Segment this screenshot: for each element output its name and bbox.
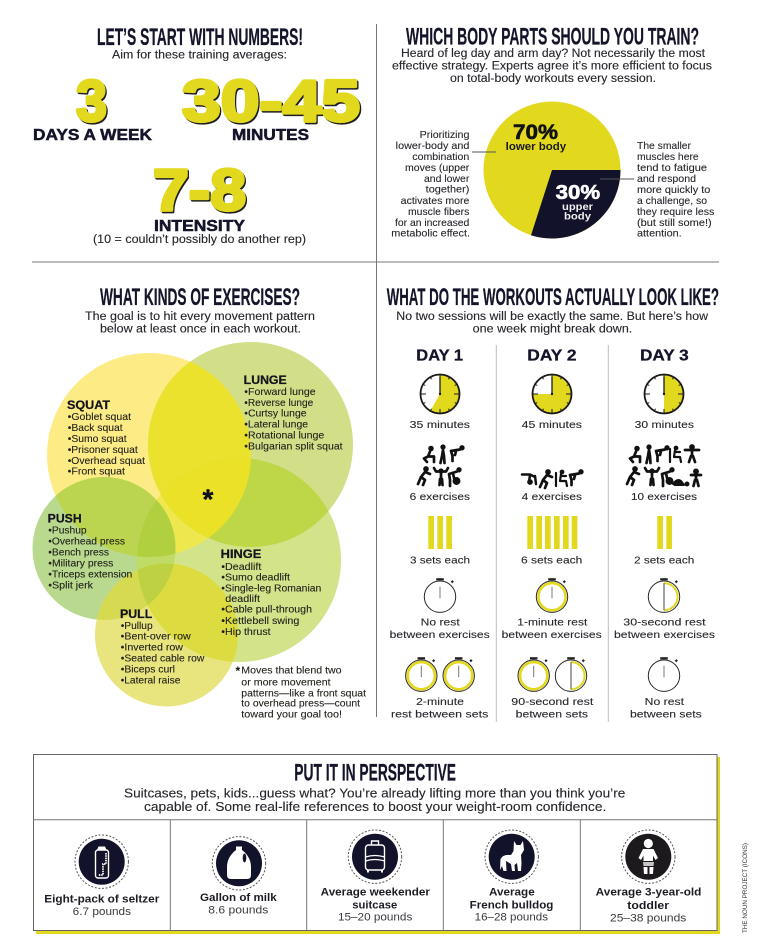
footnote: blended moves: or more movement: [241, 676, 331, 688]
list: push: [48, 512, 132, 591]
heading: let's start with numbers: LET’S START WITH NUMBERS!: [97, 24, 303, 51]
list: squat: •Goblet squat: [68, 411, 131, 423]
list: hinge: •Deadlift: [221, 561, 261, 573]
bars: 2 sets: [657, 516, 672, 549]
list: pull: •Bent-over row: [121, 631, 191, 643]
column: day 2: 4 exercises: [522, 491, 582, 503]
callout: upper body: tend to fatigue: [637, 162, 707, 174]
footnote: blended moves: to overhead press—count: [241, 698, 360, 710]
panel: numbers: [33, 24, 361, 246]
column: day 1: 2-minute: [416, 696, 464, 708]
panel: body parts: [391, 24, 714, 240]
list: hinge: •Single-leg Romanian: [221, 583, 321, 595]
list: pull: •Seated cable row: [121, 653, 205, 665]
item: french bulldog: [470, 830, 553, 924]
list: push: PUSH: [48, 512, 82, 526]
list: squat: •Prisoner squat: [68, 444, 138, 456]
item: toddler: 25–38 pounds: [610, 913, 687, 925]
stat: 7-8 intensity: INTENSITY: [154, 218, 245, 235]
stat: 7-8 intensity: 7-8: [154, 159, 247, 224]
panel: exercises: [32, 284, 366, 720]
column: day 2: 1-minute rest: [517, 617, 587, 629]
column: day 2: 90-second rest: [511, 696, 593, 708]
list: lunge: •Curtsy lunge: [244, 408, 307, 420]
item: milk: 8.6 pounds: [208, 905, 269, 917]
column: day 3: No rest: [645, 696, 684, 708]
callout: upper body: [600, 140, 714, 240]
section dividers: [32, 24, 719, 717]
list: push: •Bench press: [48, 547, 109, 559]
list: hinge: deadlift: [225, 593, 260, 605]
list: lunge: •Forward lunge: [244, 386, 316, 398]
intro text: real-life references: [124, 785, 625, 814]
stopwatch: no rest between exercises: [424, 578, 456, 612]
item: milk: Gallon of milk: [200, 892, 278, 904]
intro text: body parts: effective strategy. Experts agree it’s more efficient to focus: [392, 60, 712, 72]
column: day 3: 30-second rest: [623, 617, 706, 629]
intro text: body parts: [392, 48, 712, 85]
callout: lower body: muscle fibers: [408, 206, 469, 218]
stat: 3 days a week: [33, 69, 152, 144]
stat: 3 days a week: 3: [77, 70, 108, 135]
column: day 2: [502, 348, 602, 720]
column: day 3: 2 sets each: [634, 554, 694, 566]
pie chart: 70/30: 70%: [513, 121, 558, 144]
list: squat: •Overhead squat: [68, 455, 145, 467]
callout: lower body: metabolic effect.: [391, 228, 470, 240]
footnote: blended moves: toward your goal too!: [241, 708, 342, 720]
callout: upper body: (but still some!): [637, 217, 712, 229]
list: push: •Triceps extension: [48, 569, 132, 581]
item: toddler: [596, 830, 701, 925]
callout: lower body: combination: [412, 151, 469, 163]
list: squat: [67, 398, 145, 478]
item: french bulldog: 16–28 pounds: [475, 912, 549, 924]
item: toddler: toddler: [627, 900, 670, 912]
list: hinge: •Sumo deadlift: [221, 572, 290, 584]
intro text: sessions: one week might break down.: [473, 324, 632, 336]
intro text: body parts: on total-body workouts every session.: [450, 73, 656, 85]
list: pull: •Biceps curl: [121, 664, 175, 676]
callout: lower body: for an increased: [395, 217, 469, 229]
footnote: blended moves: patterns—like a front squat: [241, 687, 366, 699]
callout: upper body: more quickly to: [637, 184, 710, 196]
callout: lower body: moves (upper: [405, 162, 470, 174]
list: pull: •Inverted row: [121, 641, 183, 653]
column: day 1: DAY 1: [416, 348, 463, 365]
item: suitcase: 15–20 pounds: [338, 912, 413, 924]
list: pull: •Pullup: [121, 620, 153, 632]
column: day 2: 45 minutes: [522, 419, 582, 431]
list: squat: SQUAT: [67, 398, 111, 412]
column: day 1: 6 exercises: [410, 491, 470, 503]
column: day 1: between exercises: [390, 629, 490, 641]
stat: 30-45 minutes: 30-45: [182, 69, 360, 134]
list: lunge: •Rotational lunge: [244, 430, 324, 442]
item: toddler: Average 3-year-old: [596, 887, 701, 899]
list: squat: •Front squat: [68, 466, 125, 478]
item: seltzer: 6.7 pounds: [73, 906, 132, 918]
list: hinge: [221, 547, 321, 638]
item: seltzer: Eight-pack of seltzer: [44, 894, 160, 906]
list: push: •Pushup: [48, 525, 87, 537]
footnote: blended moves: *: [236, 664, 240, 678]
intro text: movement pattern: [85, 311, 315, 336]
stat: 30-45 minutes: 30-45: [183, 70, 361, 135]
intro text: sessions: No two sessions will be exactly the same. But here’s how: [396, 311, 709, 323]
callout: lower body: together): [426, 184, 469, 196]
stopwatch: 30-second rest: [648, 578, 680, 612]
intro text: real-life references: capable of. Some real-life references to boost your weight-room confidence.: [144, 799, 606, 814]
item: suitcase: Average weekender: [321, 887, 431, 899]
stat: 3 days a week: 3: [76, 69, 107, 134]
list: hinge: •Kettlebell swing: [221, 615, 299, 627]
column: day 1: 3 sets each: [410, 554, 470, 566]
intro text: movement pattern: below at least once in each workout.: [100, 324, 301, 336]
footnote: blended moves: Moves that blend two: [241, 665, 342, 677]
panel: put it in perspective: [34, 754, 720, 934]
callout: lower body: Prioritizing: [420, 129, 470, 141]
column: day 1: No rest: [421, 617, 460, 629]
icon: milk jug: [212, 837, 266, 890]
icons: 6 exercises: [418, 446, 463, 486]
pie chart: 70/30: [484, 102, 620, 238]
column: day 1: [390, 348, 490, 720]
credit: noun project: THE NOUN PROJECT (ICONS): [742, 843, 749, 933]
column: day 3: between sets: [630, 708, 702, 720]
list: push: •Military press: [48, 558, 113, 570]
icon: seltzer can: [75, 835, 128, 888]
list: lunge: •Lateral lunge: [244, 419, 308, 431]
pie chart: 70/30: 30%: [556, 182, 600, 204]
callout: upper body: and respond: [637, 173, 696, 185]
stat: 7-8 intensity: (10 = couldn’t possibly do another rep): [93, 234, 306, 246]
clock: 35 minutes: [420, 374, 460, 414]
icon: french bulldog: [485, 830, 538, 883]
column: day 3: [614, 348, 715, 720]
column: day 1: rest between sets: [391, 708, 488, 720]
item: milk: [200, 837, 278, 917]
stat: 30-45 minutes: MINUTES: [232, 127, 309, 144]
list: lunge: [244, 373, 343, 452]
column: day 3: between exercises: [614, 629, 715, 641]
stopwatch: no rest between sets: [648, 657, 680, 691]
intro text: movement pattern: The goal is to hit every movement pattern: [85, 311, 315, 323]
callout: upper body: they require less: [637, 206, 714, 218]
column: day 2: between exercises: [502, 629, 602, 641]
callout: upper body: attention.: [637, 228, 682, 240]
stopwatch: 1-minute rest: [536, 578, 568, 612]
list: pull: PULL: [120, 607, 152, 621]
list: hinge: •Cable pull-through: [221, 604, 312, 616]
stat: 7-8 intensity: [93, 158, 306, 246]
stopwatches: 2-minute rest: [406, 657, 474, 691]
list: hinge: •Hip thrust: [221, 626, 271, 638]
list: push: •Split jerk: [48, 579, 94, 591]
list: pull: [120, 607, 205, 686]
stat: 3 days a week: DAYS A WEEK: [33, 127, 152, 144]
list: lunge: •Bulgarian split squat: [244, 440, 343, 452]
asterisk: *: [202, 484, 214, 514]
panel: workouts: [387, 284, 719, 722]
icon: suitcase: [348, 830, 402, 883]
pie chart: 70/30: upper: [562, 202, 593, 213]
list: squat: •Sumo squat: [68, 433, 127, 445]
list: hinge: HINGE: [221, 547, 261, 561]
icons: 10 exercises: [627, 446, 701, 486]
icon: toddler: [622, 830, 675, 883]
item: french bulldog: French bulldog: [470, 899, 553, 911]
list: pull: •Lateral raise: [121, 674, 181, 686]
list: lunge: •Reverse lunge: [244, 397, 313, 409]
venn diagram: [32, 342, 353, 706]
item: suitcase: suitcase: [352, 899, 397, 911]
column: day 2: DAY 2: [527, 348, 577, 365]
icons: 4 exercises: [522, 470, 582, 488]
column: day 3: 10 exercises: [631, 491, 697, 503]
stat: 7-8 intensity: 7-8: [153, 158, 246, 223]
column: day 3: 30 minutes: [635, 419, 694, 431]
heading: put it in perspective: PUT IT IN PERSPECTIVE: [294, 760, 456, 787]
callout: lower body: [391, 129, 496, 240]
item: suitcase: [321, 830, 431, 924]
intro text: training averages: Aim for these training averages:: [112, 50, 287, 62]
list: push: •Overhead press: [48, 536, 125, 548]
clock: 45 minutes: [532, 374, 572, 414]
bars: 6 sets: [527, 516, 577, 549]
callout: upper body: muscles here: [637, 151, 699, 163]
callout: upper body: a challenge, so: [637, 195, 707, 207]
heading: what kinds of exercises: WHAT KINDS OF EXERCISES?: [100, 284, 300, 311]
column: day 1: 35 minutes: [410, 419, 470, 431]
intro text: body parts: Heard of leg day and arm day? Not necessarily the most: [401, 48, 706, 60]
column: day 2: between sets: [516, 708, 588, 720]
callout: lower body: lower-body and: [396, 140, 470, 152]
column dividers: [496, 345, 608, 722]
intro text: sessions: [396, 311, 709, 336]
pie chart: 70/30: lower body: [506, 141, 567, 153]
column: day 2: 6 sets each: [521, 554, 582, 566]
column: day 3: DAY 3: [640, 348, 689, 365]
item: seltzer: [44, 835, 160, 918]
footnote: blended moves: [236, 664, 366, 720]
bars: 3 sets: [428, 516, 452, 549]
callout: lower body: and lower: [424, 173, 470, 185]
list: squat: •Back squat: [68, 422, 123, 434]
callout: upper body: The smaller: [637, 140, 691, 152]
box with yellow shadow: [34, 754, 720, 934]
clock: 30 minutes: [644, 374, 684, 414]
item: french bulldog: Average: [489, 887, 535, 899]
callout: lower body: activates more: [401, 195, 470, 207]
list: lunge: LUNGE: [244, 373, 287, 387]
intro text: real-life references: Suitcases, pets, kids...guess what? You’re already lifting more than you think you’re: [124, 785, 625, 800]
stopwatches: 90-second rest: [518, 657, 587, 691]
pie chart: 70/30: body: [564, 212, 591, 222]
